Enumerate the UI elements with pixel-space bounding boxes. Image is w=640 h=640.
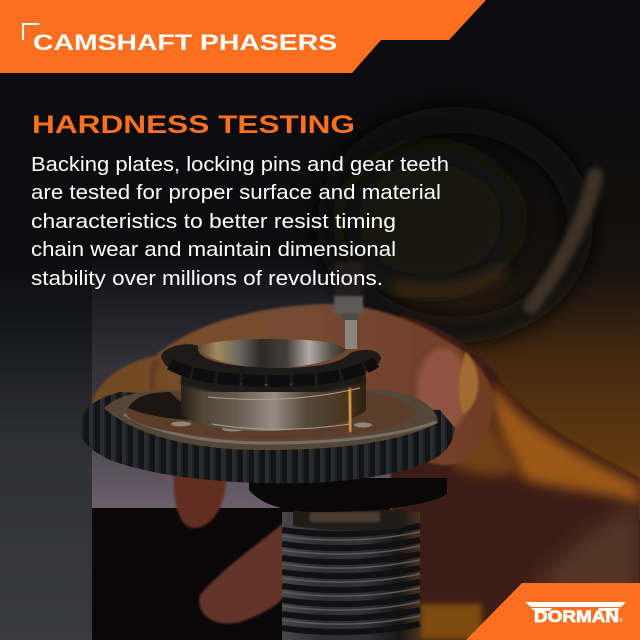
body text [31, 153, 449, 290]
hand: back of hand [390, 315, 640, 640]
hand: shaded finger creases [151, 360, 160, 402]
lower hub [249, 478, 447, 512]
background: tan arc [395, 268, 505, 291]
body text: chain wear and maintain dimensional [31, 238, 396, 261]
large gear: dark reflection [128, 392, 200, 420]
small gear: back ring [161, 344, 381, 384]
hand: thumb shadow [450, 400, 520, 475]
hardness tester indenter [334, 262, 363, 349]
icon: corner bracket [23, 24, 40, 40]
threaded shaft [282, 512, 420, 640]
logo: Dorman: DORMAN [534, 607, 619, 626]
hand: lower skin [530, 505, 640, 605]
small gear: front teeth [170, 362, 376, 381]
heading: HARDNESS TESTING [32, 111, 355, 139]
background: blurred inner disc [345, 150, 515, 290]
hand: thumb tip [417, 348, 469, 432]
hand: thumb nail [459, 352, 478, 415]
logo: Dorman [525, 602, 626, 626]
logo: Dorman: ® [619, 617, 623, 624]
shaft neck [293, 510, 404, 531]
logo panel [466, 583, 640, 640]
background: pale wall [92, 250, 392, 508]
header banner [0, 0, 486, 73]
large gear: bolt holes [171, 422, 372, 432]
body text: characteristics to better resist timing [31, 210, 396, 233]
body text: stability over millions of revolutions. [31, 267, 383, 290]
body text: are tested for proper surface and material [31, 181, 441, 204]
large gear: outer face [104, 390, 438, 450]
background: blurred dark ring [330, 120, 580, 330]
hand: upper fingers [92, 304, 495, 465]
background: black lower area [94, 508, 314, 640]
small gear: inner bore [198, 339, 346, 368]
large gear: bright rim [124, 414, 436, 443]
banner title: CAMSHAFT PHASERS [33, 30, 337, 55]
phaser body cylinder [181, 372, 366, 432]
hand: orange lit edge [490, 385, 640, 505]
background: warm table at right [390, 100, 640, 520]
hand: lower finger [199, 512, 296, 623]
background: blurred chain beads [530, 176, 595, 308]
background: orange surface at bottom [420, 604, 482, 640]
background: left column [0, 250, 92, 640]
body text: Backing plates, locking pins and gear teeth [31, 153, 449, 176]
large gear: inner recess [126, 385, 416, 439]
large gear: teeth [79, 392, 455, 483]
hand: finger under gear [174, 470, 226, 528]
